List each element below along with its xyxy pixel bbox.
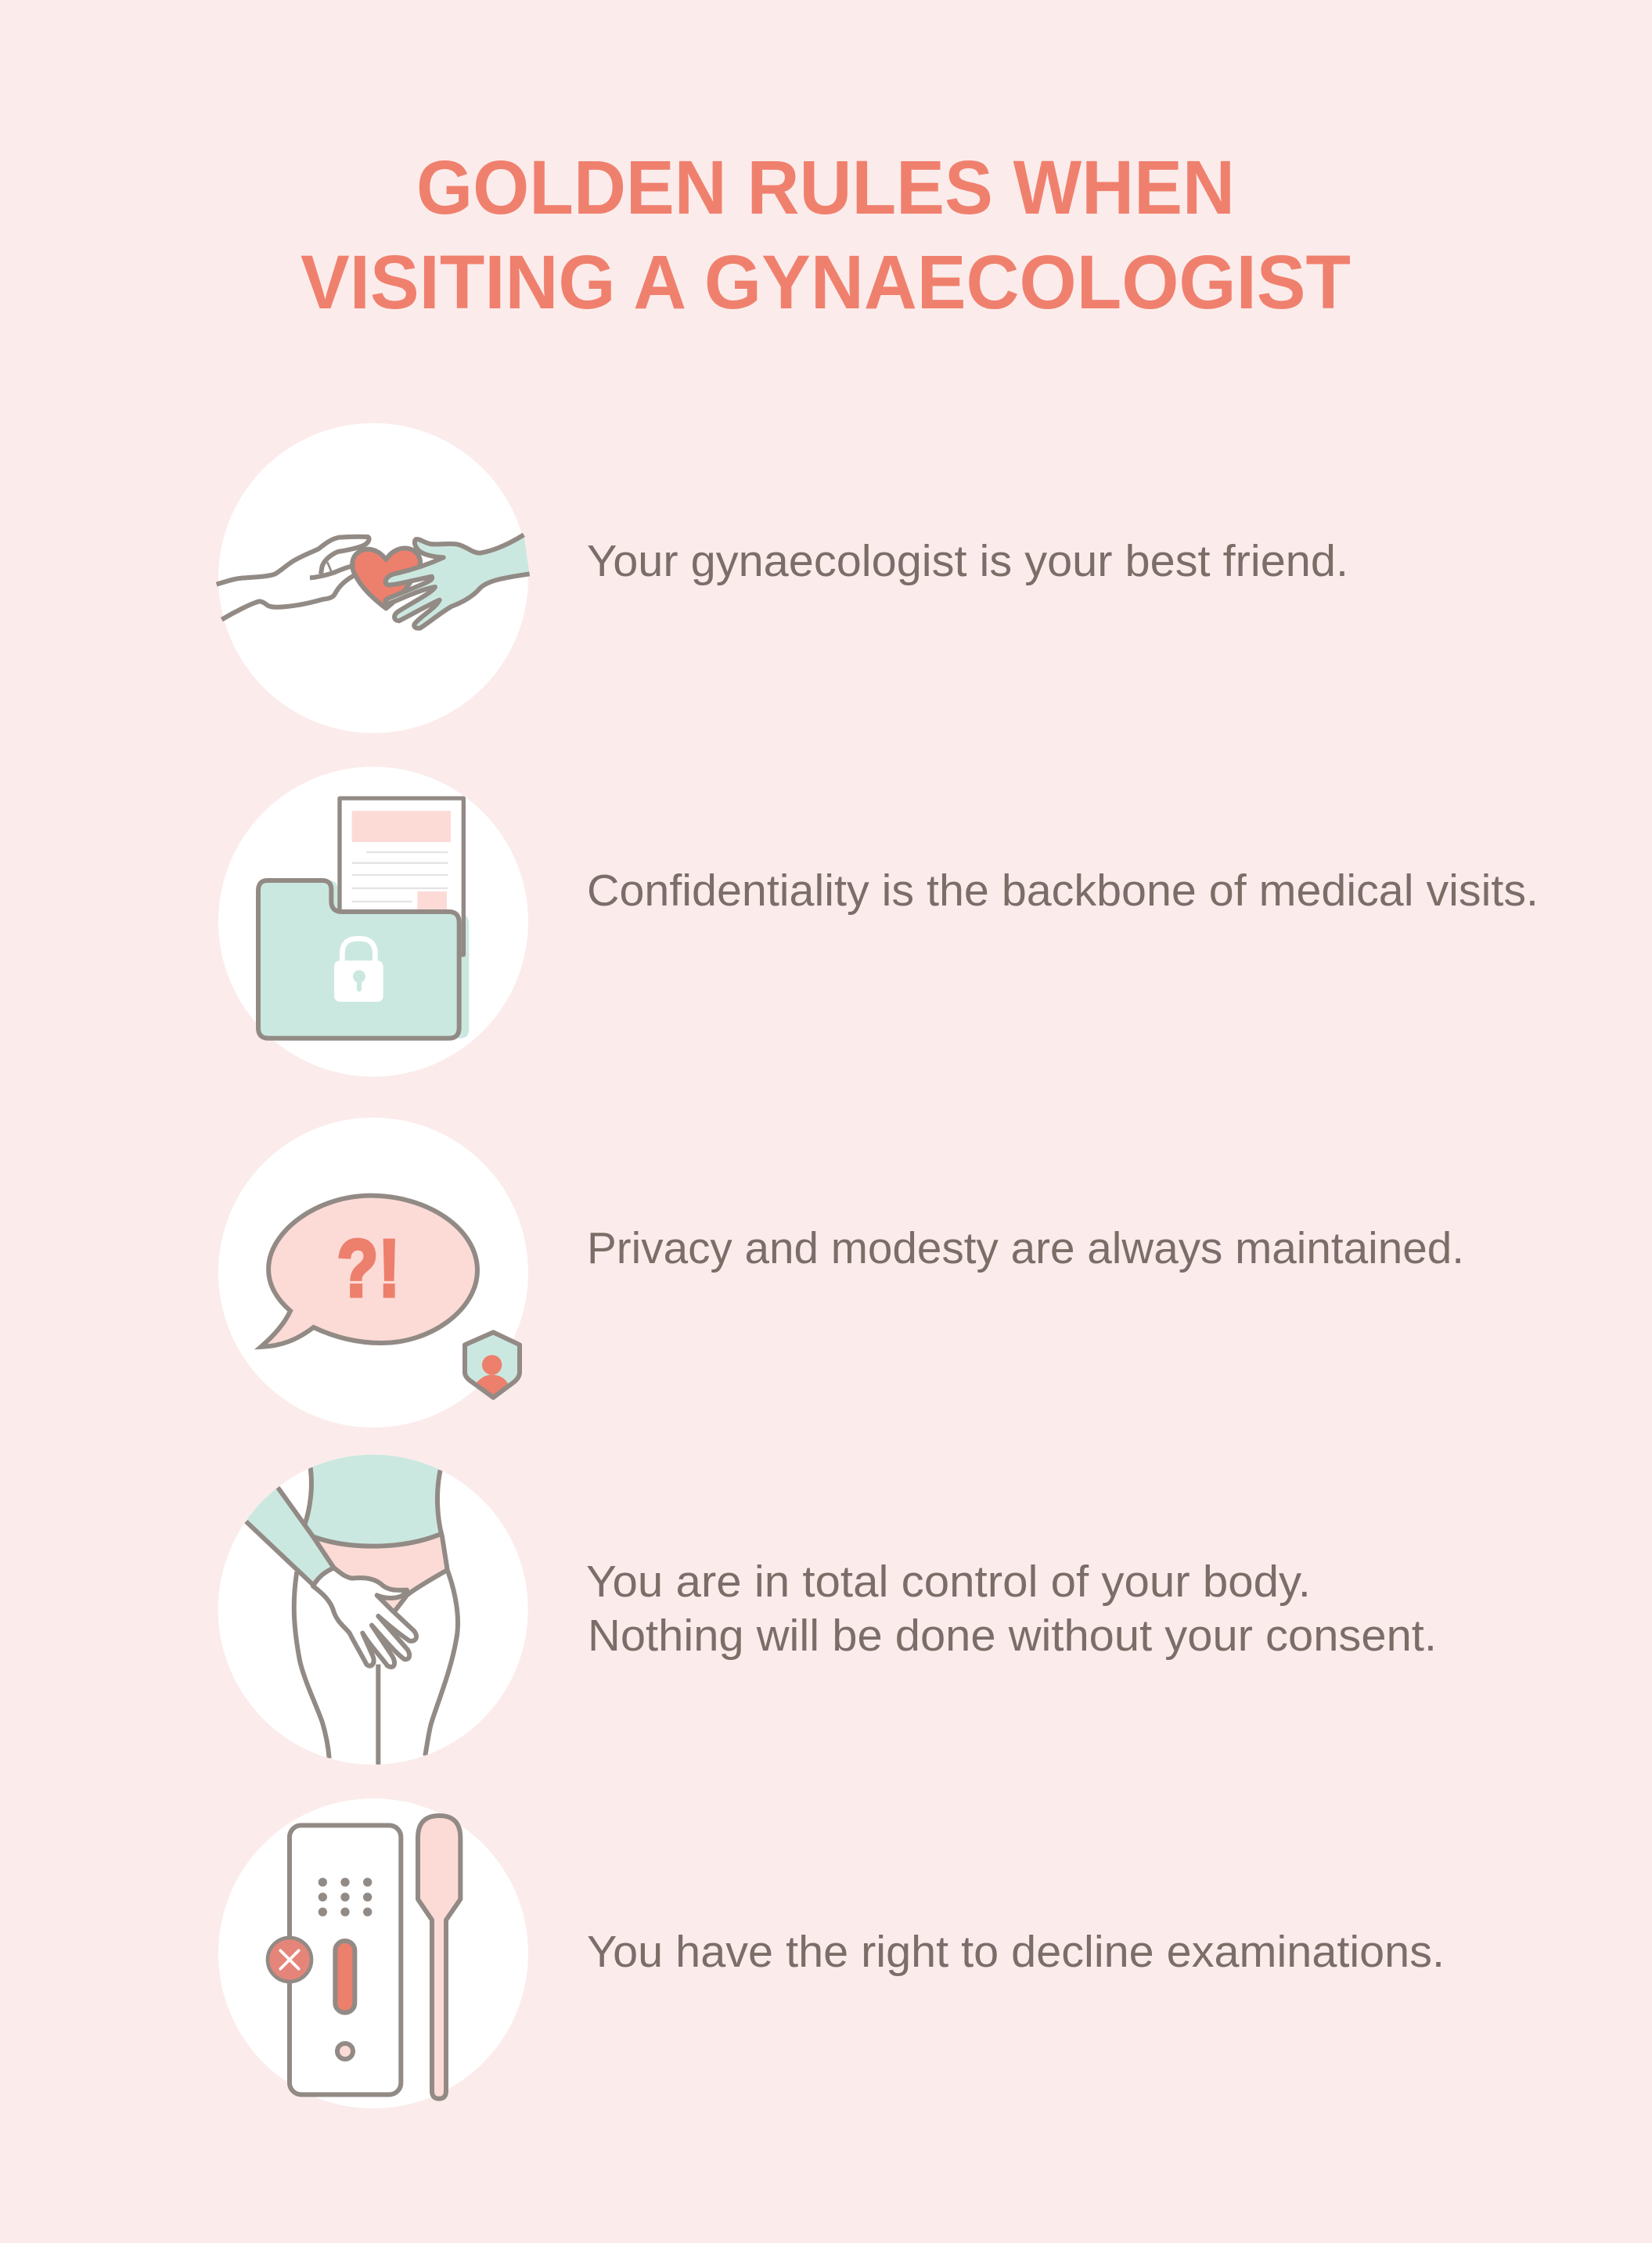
folder front: [258, 880, 459, 1039]
icon: declined cross badge: [268, 1938, 311, 1982]
icon: speech bubble and shield: [218, 1118, 528, 1428]
speech bubble: ?: [337, 1222, 378, 1313]
text: rule 4: [586, 1557, 1437, 1661]
text: rule 1: Your gynaecologist is your best friend.: [587, 536, 1348, 586]
document: [340, 798, 463, 955]
test device: [290, 1825, 401, 2094]
folder back: [282, 880, 469, 1039]
icon: padlock: [334, 938, 383, 1002]
left hand: [217, 537, 369, 620]
hand: [313, 1568, 416, 1667]
text: rule 4: Nothing will be done without your consent.: [588, 1611, 1437, 1661]
icon: body with protective hand: [218, 1448, 528, 1765]
shield with person: [465, 1332, 520, 1398]
title: [301, 145, 1351, 325]
speech bubble: !: [379, 1222, 400, 1313]
icon: test device and swab: [218, 1798, 528, 2108]
title: GOLDEN RULES WHEN: [416, 145, 1235, 230]
outlines: [246, 1467, 458, 1765]
swab: [418, 1816, 460, 2099]
text: rule 2: Confidentiality is the backbone of medical visits.: [587, 866, 1539, 916]
right hand: [386, 535, 530, 628]
speech bubble: [261, 1196, 477, 1347]
text: rule 4: You are in total control of your body.: [586, 1557, 1311, 1607]
text: rule 3: Privacy and modesty are always maintained.: [587, 1223, 1464, 1273]
clothing: [304, 1448, 441, 1545]
icon: hands holding a heart: [217, 423, 530, 733]
icon: locked folder with document: [218, 767, 528, 1077]
title: VISITING A GYNAECOLOGIST: [301, 239, 1351, 325]
heart: [352, 548, 420, 608]
text: rule 5: You have the right to decline examinations.: [587, 1927, 1445, 1977]
